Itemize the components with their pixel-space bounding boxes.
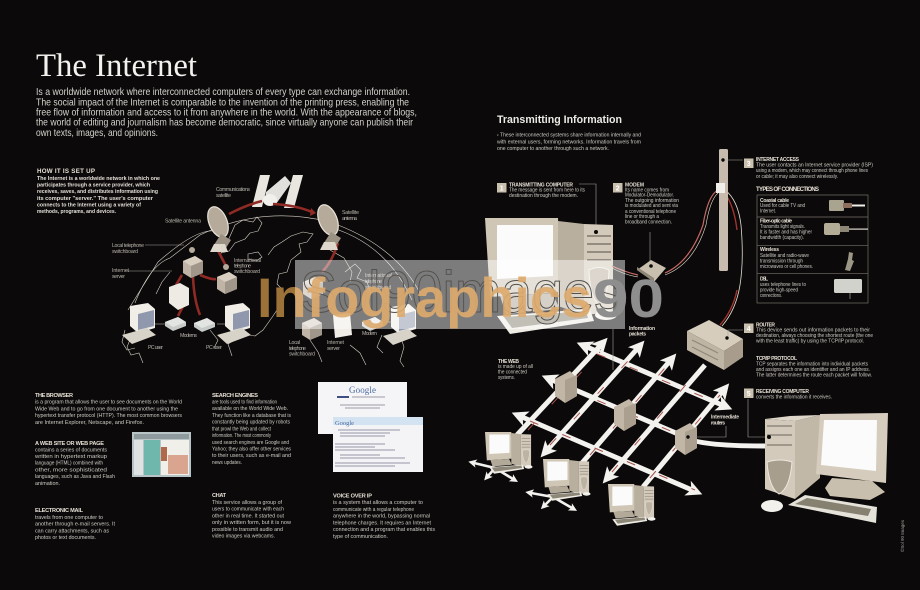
world outline and link arcs	[127, 216, 420, 367]
step 3: internet access: The user contacts an Internet service provider (ISP)	[756, 162, 873, 168]
row: coaxial cable: Used for cable TV and	[760, 203, 805, 209]
text block: tcp/ip protocol: TCP separates the information into individual packets	[756, 362, 868, 368]
row: dsl: connections.	[760, 293, 782, 299]
diagram labels: switchboard	[112, 249, 138, 255]
icon: satellite	[252, 175, 303, 208]
diagram labels: switchboard	[289, 352, 315, 358]
row: coaxial cable: Internet.	[760, 208, 776, 214]
network diagram	[112, 175, 420, 367]
text block: search engines: Yahoo; they also offer other services	[212, 446, 291, 452]
text block: the browser: Wide Web and to go from one document to another using the	[35, 406, 178, 412]
row: wireless: Wireless	[760, 247, 779, 253]
diagram labels: PC user	[148, 345, 163, 351]
row: fiber-optic cable	[760, 218, 868, 241]
step 1: transmitting computer	[497, 182, 596, 232]
text block: search engines: constantly being updated by robots	[212, 420, 290, 426]
icons: switchboards	[183, 247, 323, 340]
text block: voice over ip: VOICE OVER IP	[333, 494, 372, 500]
label: the web: systems.	[498, 375, 515, 381]
text block: the browser	[35, 393, 182, 426]
red signal links	[176, 201, 338, 316]
illustration: receiving computer	[761, 413, 888, 523]
text block: electronic mail: photos or text documents.	[35, 535, 96, 541]
text block: voice over ip: anywhere in the world, bypassing normal	[333, 514, 430, 520]
text block: how it is set up: The Internet is a worldwide network in which one	[37, 176, 160, 182]
text block: search engines: information. The most commonly	[212, 433, 271, 439]
copyright: ©Sol 90 Images	[899, 519, 905, 552]
step 3: internet access: or cable; it may also connect wirelessly.	[756, 174, 838, 180]
text block: voice over ip: is a system that allows a computer to	[333, 500, 423, 506]
diagram labels: switchboard	[234, 269, 260, 275]
step 4: router: destination, always choosing the shortest route (the one	[756, 333, 873, 339]
text block: chat: possible to transmit audio and	[212, 527, 283, 533]
watermark: Sol90images	[300, 260, 622, 325]
text block: transmitting intro: one computer to another through such a network.	[497, 146, 609, 152]
text block: chat: users to communicate with each	[212, 507, 284, 513]
text block: how it is set up: methods, programs, and devices.	[37, 209, 116, 215]
text block: web site: written in hypertext markup	[34, 454, 107, 460]
row: wireless: transmission through	[760, 258, 803, 264]
step 2: modem: line or through a	[625, 214, 659, 220]
intro text	[36, 86, 417, 139]
diagram labels: PC user	[206, 345, 222, 351]
panel: types of connections	[756, 187, 868, 303]
text block: web site: animation.	[35, 481, 60, 487]
text block: web site: language (HTML) combined with	[35, 461, 103, 467]
step 5: receiving computer: 5	[747, 391, 751, 398]
row: coaxial cable	[760, 198, 865, 214]
illustration: router	[687, 320, 743, 370]
text block: chat: other in real time. It started out	[212, 514, 284, 520]
text block: chat: video images via webcams.	[212, 534, 275, 540]
diagram labels: Internet	[112, 268, 130, 274]
text block: how it is set up: receives, saves, and distributes information using	[37, 189, 158, 195]
label: the web: is made up of all	[498, 364, 533, 370]
diagram labels: Satellite antenna	[165, 218, 201, 224]
illustration: modem	[637, 260, 666, 282]
step 1: transmitting computer: The message is sent from here to its	[509, 188, 585, 194]
diagram labels: Internet	[327, 340, 345, 346]
text block: transmitting intro: › These interconnected systems share information internally and	[497, 132, 641, 138]
step 2: modem: The outgoing information	[625, 198, 679, 204]
step 5: receiving computer: converts the information it receives.	[756, 394, 832, 400]
text block: transmitting intro	[496, 132, 641, 152]
text block: voice over ip	[333, 494, 435, 540]
text block: search engines: that prowl the Web and collect	[212, 426, 271, 432]
step 3: internet access	[744, 157, 873, 180]
text block: voice over ip: connection and a program that enables this	[333, 527, 435, 533]
label: intermediate routers: Intermediate	[711, 414, 739, 420]
step 3: internet access: 3	[747, 161, 751, 168]
step 2: modem: a conventional telephone	[625, 209, 676, 215]
diagram labels: server	[327, 346, 340, 352]
intermediate routers	[555, 371, 697, 455]
diagram labels: International	[365, 273, 392, 279]
text block: search engines: used search engines are Google and	[212, 440, 289, 446]
text block: web site: contains a series of documents	[35, 447, 107, 453]
row: fiber-optic cable: It is faster and has higher	[760, 230, 812, 236]
diagram labels: Satellite	[342, 210, 359, 216]
screenshots: google: Google	[349, 385, 376, 395]
illustration: small computers	[474, 432, 656, 526]
text block: transmitting intro: with external users, forming networks. Information travels from	[496, 140, 641, 146]
text block: web site: other, more sophisticated	[35, 467, 107, 473]
diagram labels: Local telephone	[112, 243, 144, 249]
text block: the browser: hypertext transfer protocol (HTTP). The most common browsers	[35, 413, 182, 419]
row: dsl: uses telephone lines to	[760, 282, 806, 288]
text block: search engines: SEARCH ENGINES	[212, 393, 258, 399]
diagram labels: Modems	[180, 333, 197, 339]
text block: electronic mail: can carry attachments, such as	[35, 528, 109, 534]
heading: types of connections: TYPES OF CONNECTIONS	[756, 187, 819, 193]
connections	[517, 346, 765, 490]
icons: PC users	[122, 303, 417, 353]
diagram labels: satellite	[216, 193, 231, 199]
step 1: transmitting computer: 1	[500, 186, 504, 192]
step 4: router: with the least traffic) by using the TCP/IP protocol.	[756, 338, 864, 344]
text block: electronic mail: travels from one computer to	[35, 515, 103, 521]
text block: voice over ip: type of communication.	[333, 534, 388, 540]
step 2: modem: 2	[616, 186, 620, 192]
text block: electronic mail	[35, 508, 115, 541]
text block: how it is set up: connects to the Internet using a variety of	[37, 202, 141, 208]
label: information packets: Information	[629, 326, 655, 332]
diagram labels: Communications	[216, 187, 250, 193]
text block: web site: languages, such as Java and Flash	[35, 474, 115, 480]
text block: electronic mail: another through e-mail servers. It	[35, 522, 115, 528]
step 1: transmitting computer: TRANSMITTING COMPUTER	[509, 182, 573, 188]
text block: how it is set up: participates through a service provider, which	[37, 183, 150, 189]
text block: chat: This service allows a group of	[212, 500, 282, 506]
heading: transmitting information: Transmitting Information	[497, 114, 622, 126]
label: intermediate routers	[690, 414, 739, 437]
label: the web: THE WEB	[498, 359, 519, 365]
step 2: modem: Modulator-Demodulator.	[625, 192, 674, 198]
text block: web site	[34, 441, 115, 487]
step 4: router	[744, 322, 873, 344]
label: information packets: packets	[629, 332, 646, 338]
diagram labels: switchboard	[365, 285, 391, 291]
watermark: 90	[593, 269, 664, 329]
step 4: router: This device sends out information packets to their	[756, 328, 870, 334]
text block: the browser: THE BROWSER	[35, 393, 73, 399]
intro text: Is a worldwide network where interconnected computers of every type can exchange information.	[36, 86, 410, 98]
diagram labels: International	[234, 258, 261, 264]
step 1: transmitting computer: destination through the modem.	[509, 193, 578, 199]
row: fiber-optic cable: bandwidth (capacity).	[760, 235, 804, 241]
row: fiber-optic cable: Transmits light signals.	[760, 224, 805, 230]
step 3: internet access: using a modem, which may connect through phone lines	[756, 168, 868, 174]
illustration: cables	[612, 190, 742, 326]
text block: the browser: is a program that allows the user to see documents on the World	[35, 400, 182, 406]
intro text: free flow of information and access to it from anywhere in the world. With the appearance of blogs,	[36, 107, 417, 119]
icons: modems	[165, 317, 383, 332]
icons: internet servers	[169, 283, 352, 338]
diagram labels: telephone	[365, 279, 382, 285]
diagram labels: telephone	[234, 264, 251, 270]
intro text: The social impact of the Internet is comparable to the invention of the printing press, enabling the	[36, 96, 409, 108]
row: dsl: DSL	[760, 276, 768, 282]
text block: search engines: to their users, such as e-mail and	[212, 453, 291, 459]
diagram labels: Local	[289, 340, 300, 346]
row: wireless: Satellite and radio-wave	[760, 253, 809, 259]
step 4: router: 4	[747, 326, 751, 333]
diagram labels: Modem	[362, 331, 377, 337]
text block: how it is set up: its computer "server." The user's computer	[37, 196, 154, 202]
intro text: the world of editing and journalism has become democratic, since virtually anyone can publish their	[36, 117, 413, 129]
screenshots: google	[318, 382, 423, 472]
text block: electronic mail: ELECTRONIC MAIL	[35, 508, 84, 514]
text block: search engines: news updates.	[212, 460, 242, 466]
text block: tcp/ip protocol: The latter determines the route each packet will follow.	[756, 372, 872, 378]
screenshots: google: Google	[335, 420, 354, 427]
text block: tcp/ip protocol	[756, 356, 872, 378]
illustration: utility pole	[716, 149, 743, 271]
text block: how it is set up: HOW IT IS SET UP	[37, 168, 95, 175]
diagram labels: antenna	[342, 216, 357, 222]
diagram labels: telephone	[289, 346, 306, 352]
screenshot: web page	[132, 432, 191, 477]
title: The Internet	[36, 48, 197, 84]
step 5: receiving computer	[744, 388, 832, 437]
text block: search engines: available on the World Wide Web.	[212, 406, 288, 412]
text block: web site: A WEB SITE OR WEB PAGE	[35, 441, 104, 447]
web grid	[474, 320, 765, 526]
step 2: modem: MODEM	[625, 182, 644, 188]
illustration: sending computer	[485, 218, 617, 334]
row: coaxial cable: Coaxial cable	[760, 198, 789, 204]
watermark: Infographics	[257, 266, 592, 329]
text block: tcp/ip protocol: TCP/IP PROTOCOL	[756, 356, 797, 362]
label: information packets	[613, 326, 655, 370]
text block: chat	[212, 493, 291, 540]
intro text: own texts, images, and opinions.	[36, 127, 158, 139]
text block: the browser: are Internet Explorer, Netscape, and Firefox.	[35, 420, 144, 426]
step 2: modem: broadband connection.	[625, 220, 672, 226]
label: the web	[498, 359, 533, 381]
text block: voice over ip: communicate with a regular telephone	[333, 507, 414, 513]
text block: search engines: are tools used to find information	[212, 400, 277, 406]
label: intermediate routers: routers	[711, 420, 725, 426]
label: the web: the connected	[498, 370, 527, 376]
step 2: modem: Its name comes from	[625, 188, 669, 194]
diagram labels	[112, 187, 392, 358]
row: fiber-optic cable: Fiber-optic cable	[760, 218, 792, 224]
step 5: receiving computer: RECEIVING COMPUTER	[756, 389, 809, 395]
diagram labels: server	[112, 274, 125, 280]
text block: search engines: They function like a database that is	[212, 413, 291, 419]
step 3: internet access: INTERNET ACCESS	[756, 157, 800, 163]
text block: chat: only in written form, but it is now	[212, 520, 291, 526]
watermark: Infographics	[257, 266, 592, 329]
step 2: modem: is modulated and sent via	[625, 203, 678, 209]
text block: chat: CHAT	[212, 493, 227, 499]
text block: voice over ip: telephone charges. It requires an Internet	[333, 520, 431, 526]
text block: search engines	[212, 393, 291, 466]
row: wireless: microwaves or cell phones.	[760, 264, 813, 270]
row: dsl: provide high-speed	[760, 288, 798, 294]
row: dsl	[760, 276, 862, 299]
information packets	[528, 348, 726, 490]
text block: how it is set up	[37, 168, 160, 215]
icon: satellite antennas	[204, 202, 342, 252]
text block: tcp/ip protocol: and assigns each one an identifier and an IP address.	[756, 367, 870, 373]
step 4: router: ROUTER	[756, 322, 775, 328]
step 2: modem	[613, 182, 679, 262]
row: wireless	[760, 247, 854, 271]
